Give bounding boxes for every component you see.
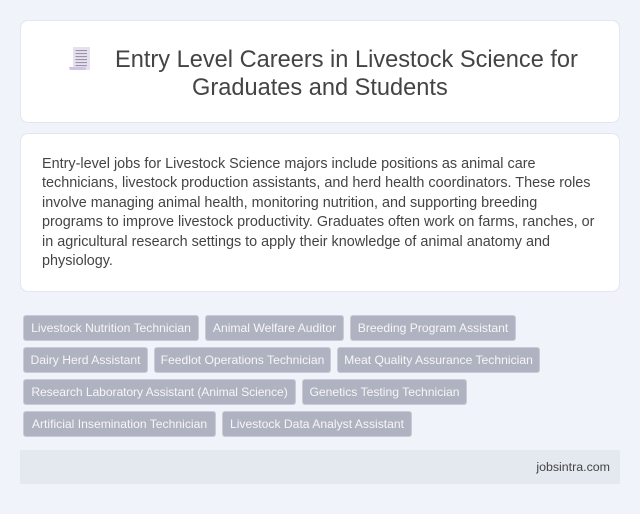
tag: Genetics Testing Technician <box>309 385 460 399</box>
tag: Breeding Program Assistant <box>358 321 508 335</box>
tag <box>205 315 344 341</box>
tag: Meat Quality Assurance Technician <box>344 353 533 367</box>
tag <box>302 379 467 405</box>
tag: Livestock Nutrition Technician <box>31 321 191 335</box>
tag <box>350 315 516 341</box>
text block: description: involve managing animal health, monitoring nutrition, and supporting breeding <box>42 195 537 211</box>
text block: description: technicians, livestock production assistants, and herd health coordinators. These roles <box>42 175 590 191</box>
footer text: source: jobsintra.com <box>536 460 610 474</box>
icon: document scroll <box>69 47 90 70</box>
text block: description <box>42 156 594 269</box>
tag <box>23 411 216 437</box>
tag list <box>23 315 540 437</box>
text block: description: in agricultural research settings to apply their knowledge of animal anatomy and <box>42 234 550 250</box>
tag <box>23 315 199 341</box>
tag <box>337 347 540 373</box>
tag: Dairy Herd Assistant <box>30 353 140 367</box>
title <box>115 47 578 101</box>
tag <box>23 347 148 373</box>
title: Graduates and Students <box>192 75 448 101</box>
tag: Feedlot Operations Technician <box>161 353 324 367</box>
title: Entry Level Careers in Livestock Science for <box>115 47 578 73</box>
tag: Animal Welfare Auditor <box>213 321 336 335</box>
text block: description: programs to improve livestock productivity. Graduates often work on farms, ranches, or <box>42 214 594 230</box>
tag: Artificial Insemination Technician <box>32 417 207 431</box>
text block: description: Entry-level jobs for Livestock Science majors include positions as animal care <box>42 156 536 172</box>
tag <box>23 379 296 405</box>
tag <box>154 347 331 373</box>
text block: description: physiology. <box>42 253 113 269</box>
panel: title card <box>20 20 620 123</box>
footer bar <box>20 450 620 484</box>
tag <box>222 411 412 437</box>
panel: description card <box>20 133 620 292</box>
tag: Research Laboratory Assistant (Animal Science) <box>31 385 288 399</box>
tag: Livestock Data Analyst Assistant <box>230 417 404 431</box>
